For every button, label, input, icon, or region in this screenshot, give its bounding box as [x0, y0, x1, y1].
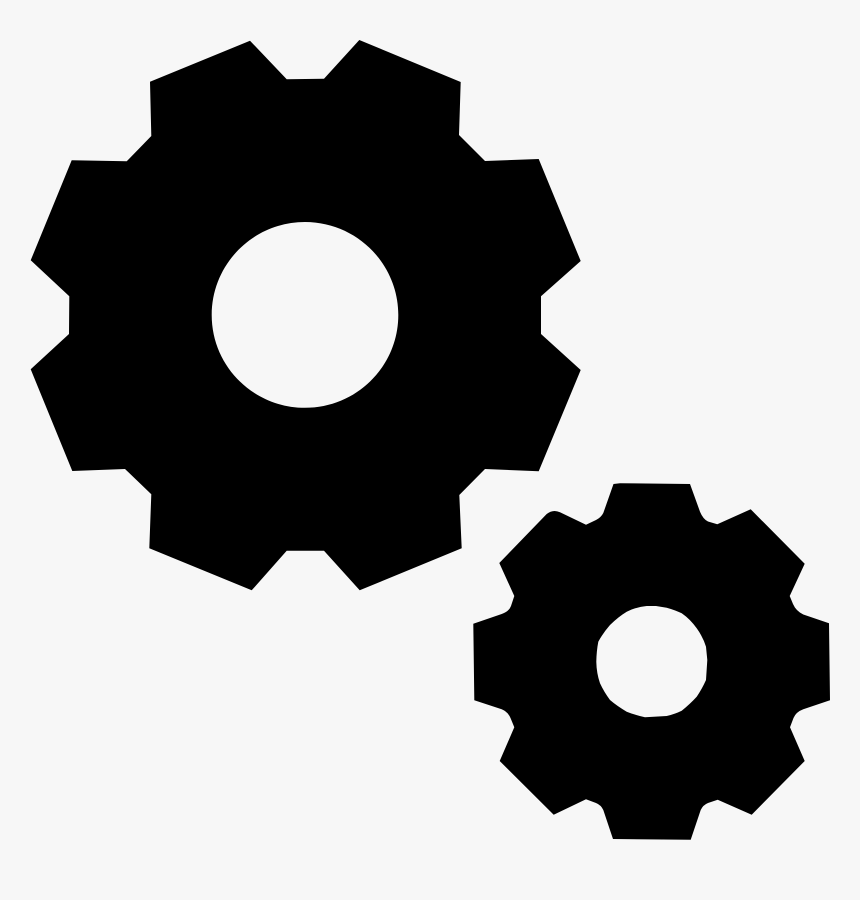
icon: large gear	[31, 40, 581, 590]
icon: small gear	[473, 483, 830, 840]
